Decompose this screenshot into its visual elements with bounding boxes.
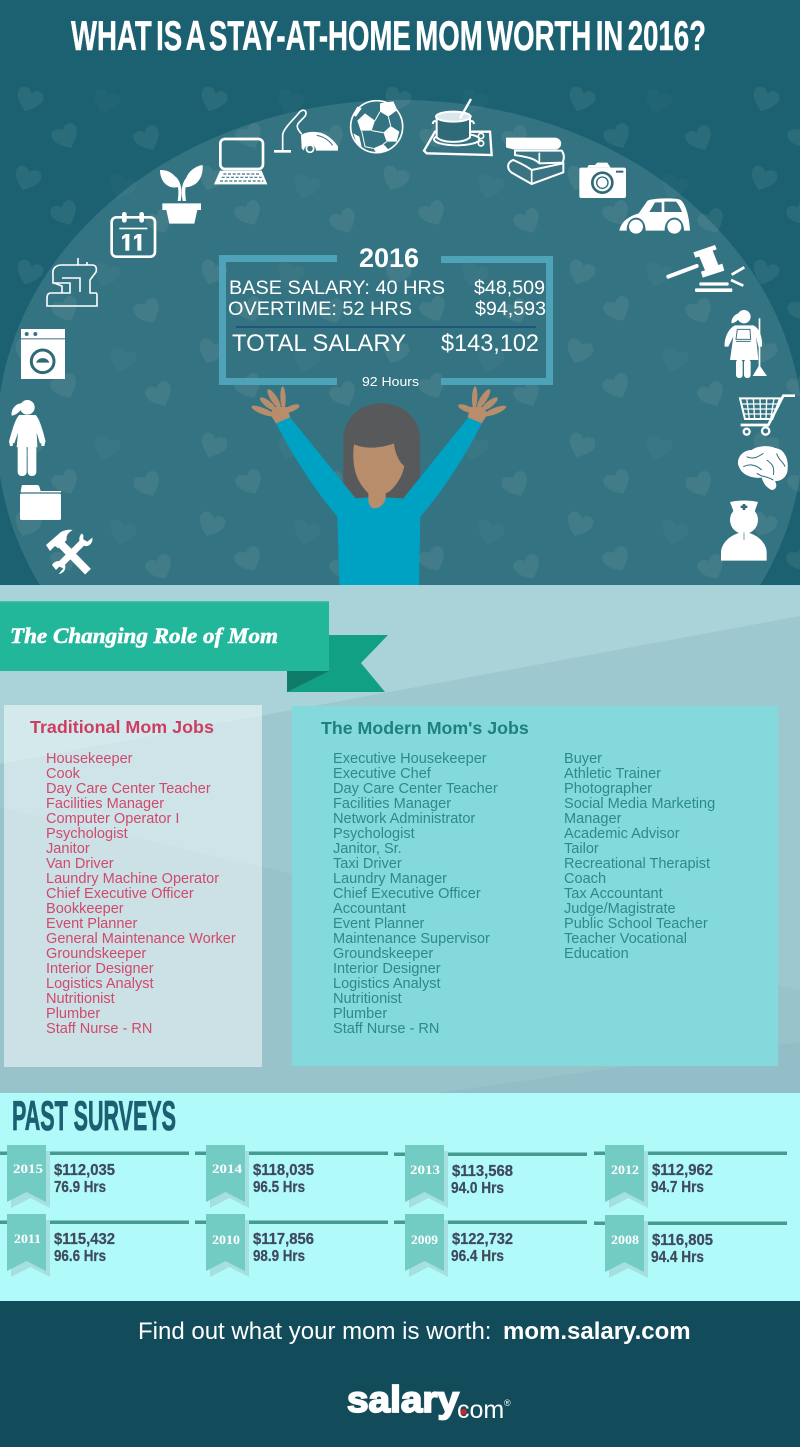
icon: woman in suit (9, 400, 46, 476)
survey 2011: $115,432 (54, 1231, 115, 1248)
icon: camera (579, 163, 626, 198)
survey 2010: $117,856 (253, 1231, 314, 1248)
traditional job list: Laundry Machine Operator (46, 871, 219, 887)
panel: modern mom's jobs (292, 706, 778, 1066)
icon: gavel (668, 245, 744, 292)
modern job list column one: Event Planner (333, 916, 425, 932)
modern job list column two: Social Media Marketing (564, 796, 715, 812)
ribbon banner (0, 601, 388, 692)
salary breakdown: $94,593 (475, 298, 546, 320)
modern job list column one: Groundskeeper (333, 946, 433, 962)
modern job list column two: Teacher Vocational (564, 931, 687, 947)
panel: modern mom's jobs: The Modern Mom's Jobs (321, 718, 529, 738)
right hand (457, 386, 507, 423)
traditional job list: Nutritionist (46, 991, 115, 1007)
traditional job list: Logistics Analyst (46, 976, 154, 992)
modern job list column one: Day Care Center Teacher (333, 781, 498, 797)
survey 2014: $118,035 (253, 1162, 314, 1179)
icon: calendar (112, 212, 155, 257)
survey 2009: 2009 (411, 1233, 438, 1247)
survey 2011: 2011 (14, 1232, 41, 1246)
survey 2008: 2008 (611, 1233, 639, 1247)
traditional job list (46, 751, 236, 1037)
heart pattern (0, 80, 800, 585)
icon: pot on stove (424, 99, 492, 155)
modern job list column one: Nutritionist (333, 991, 402, 1007)
modern job list column two: Academic Advisor (564, 826, 680, 842)
survey 2011: 96.6 Hrs (54, 1248, 106, 1265)
icon: sewing machine (47, 258, 97, 306)
salary breakdown (228, 243, 546, 389)
panel: footer (0, 1301, 800, 1447)
modern job list column one: Taxi Driver (333, 856, 402, 872)
survey 2010: 98.9 Hrs (253, 1248, 305, 1265)
salary breakdown: $48,509 (474, 277, 545, 299)
modern job list column two: Tax Accountant (564, 886, 663, 902)
survey 2013 (394, 1145, 587, 1208)
icon: shopping cart (740, 396, 795, 435)
modern job list column one: Network Administrator (333, 811, 475, 827)
survey 2013: 94.0 Hrs (451, 1180, 504, 1197)
survey 2012: $112,962 (652, 1162, 713, 1179)
survey 2014: 96.5 Hrs (253, 1179, 305, 1196)
survey 2012 (594, 1145, 787, 1208)
salary.com logo: salary (347, 1379, 459, 1420)
modern job list column one (333, 751, 498, 1037)
background dome (0, 100, 800, 585)
modern job list column one: Psychologist (333, 826, 415, 842)
icon: brain (738, 446, 788, 490)
icon: stack of books (506, 138, 564, 184)
modern job list column two: Athletic Trainer (564, 766, 661, 782)
traditional job list: Janitor (46, 841, 90, 857)
call to action (138, 1318, 691, 1345)
modern job list column one: Facilities Manager (333, 796, 451, 812)
salary breakdown: BASE SALARY: 40 HRS (229, 277, 445, 299)
shirt (276, 417, 482, 585)
icon: folder (20, 485, 61, 520)
panel: traditional mom jobs: Traditional Mom Jobs (30, 717, 214, 737)
traditional job list: Plumber (46, 1006, 100, 1022)
modern job list column one: Laundry Manager (333, 871, 447, 887)
salary breakdown: OVERTIME: 52 HRS (228, 298, 412, 320)
icon: hammer and wrench (46, 530, 93, 574)
ribbon banner: The Changing Role of Mom (10, 623, 278, 648)
modern job list column one: Accountant (333, 901, 406, 917)
traditional job list: Cook (46, 766, 81, 782)
modern job list column one: Maintenance Supervisor (333, 931, 490, 947)
survey 2012: 94.7 Hrs (651, 1179, 704, 1196)
modern job list column two: Photographer (564, 781, 652, 797)
modern job list column two: Public School Teacher (564, 916, 708, 932)
traditional job list: Chief Executive Officer (46, 886, 194, 902)
salary breakdown: $143,102 (441, 330, 539, 357)
left hand (250, 386, 301, 423)
traditional job list: Computer Operator I (46, 811, 179, 827)
icon: nurse (721, 500, 767, 561)
salary breakdown: TOTAL SALARY (232, 330, 406, 357)
icon: car (619, 198, 690, 234)
panel: traditional mom jobs (4, 705, 262, 1067)
past surveys heading: PAST SURVEYS (12, 1092, 176, 1139)
salary breakdown: 2016 (359, 243, 419, 273)
traditional job list: Housekeeper (46, 751, 133, 767)
survey 2008: 94.4 Hrs (651, 1249, 704, 1266)
call to action: mom.salary.com (503, 1318, 691, 1345)
traditional job list: General Maintenance Worker (46, 931, 236, 947)
survey 2009: $122,732 (452, 1231, 513, 1248)
modern job list column two: Recreational Therapist (564, 856, 710, 872)
traditional job list: Staff Nurse - RN (46, 1021, 152, 1037)
survey 2014 (195, 1145, 388, 1208)
hair (343, 403, 420, 500)
survey 2015: $112,035 (54, 1162, 115, 1179)
modern job list column one: Chief Executive Officer (333, 886, 481, 902)
modern job list column two: Manager (564, 811, 622, 827)
modern job list column one: Plumber (333, 1006, 387, 1022)
call to action: Find out what your mom is worth: (138, 1318, 491, 1345)
modern job list column one: Executive Housekeeper (333, 751, 487, 767)
icon: laptop (214, 139, 267, 184)
survey 2009: 96.4 Hrs (451, 1248, 504, 1265)
survey 2014: 2014 (212, 1162, 243, 1176)
salary breakdown: 92 Hours (362, 374, 420, 389)
modern job list column two: Buyer (564, 751, 602, 767)
survey 2010 (195, 1214, 388, 1277)
traditional job list: Facilities Manager (46, 796, 164, 812)
modern job list column two: Judge/Magistrate (564, 901, 676, 917)
traditional job list: Event Planner (46, 916, 138, 932)
traditional job list: Van Driver (46, 856, 114, 872)
neck (368, 492, 386, 508)
salary frame (219, 255, 553, 385)
face (353, 443, 404, 493)
survey 2015: 76.9 Hrs (54, 1179, 106, 1196)
traditional job list: Bookkeeper (46, 901, 124, 917)
survey 2012: 2012 (611, 1163, 639, 1177)
modern job list column two: Coach (564, 871, 606, 887)
survey 2013: $113,568 (452, 1163, 513, 1180)
mom illustration (250, 386, 507, 585)
icon: washing machine (21, 329, 65, 379)
survey 2008: $116,805 (652, 1232, 713, 1249)
salary.com logo (347, 1379, 511, 1424)
survey 2009 (394, 1214, 587, 1277)
modern job list column one: Interior Designer (333, 961, 441, 977)
modern job list column one: Janitor, Sr. (333, 841, 402, 857)
survey 2013: 2013 (410, 1163, 440, 1177)
traditional job list: Psychologist (46, 826, 128, 842)
icon: maid with broom (725, 310, 767, 378)
salary.com logo: com (457, 1396, 504, 1424)
salary.com logo: ® (504, 1398, 511, 1408)
modern job list column one: Staff Nurse - RN (333, 1021, 439, 1037)
icon: vacuum cleaner (274, 110, 338, 153)
traditional job list: Groundskeeper (46, 946, 146, 962)
modern job list column one: Executive Chef (333, 766, 432, 782)
survey 2008 (594, 1215, 787, 1278)
traditional job list: Day Care Center Teacher (46, 781, 211, 797)
panel: changing role of mom (0, 585, 800, 1093)
survey 2010: 2010 (212, 1233, 240, 1247)
panel: hero (0, 0, 800, 585)
modern job list column two: Tailor (564, 841, 599, 857)
modern job list column one: Logistics Analyst (333, 976, 441, 992)
panel: past surveys (0, 1092, 800, 1301)
survey 2015: 2015 (13, 1162, 43, 1176)
modern job list column two: Education (564, 946, 629, 962)
survey 2015 (0, 1145, 189, 1208)
traditional job list: Interior Designer (46, 961, 154, 977)
survey 2011 (0, 1214, 189, 1277)
icon: potted plant (160, 165, 203, 224)
modern job list column two (564, 751, 715, 962)
icon: soccer ball (351, 101, 403, 153)
